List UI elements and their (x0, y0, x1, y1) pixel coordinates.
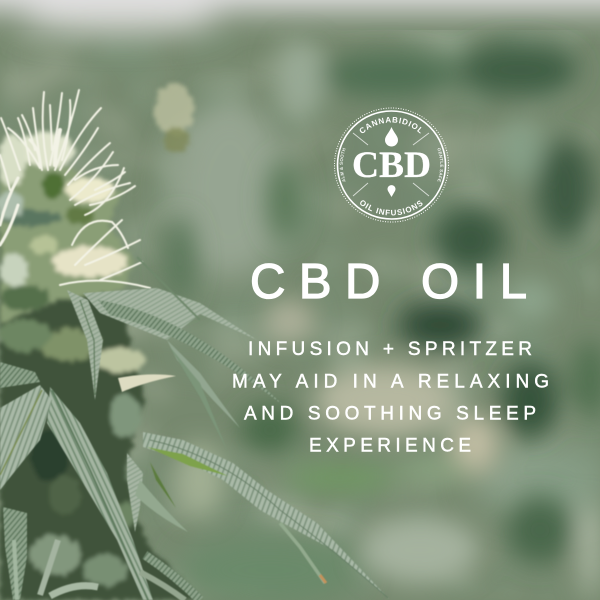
badge side text right: GENTLE SAFE (437, 148, 444, 182)
bud: pistil hairs (0, 90, 150, 288)
badge heading: CANNABIDIOL: CANNABIDIOL (360, 117, 422, 134)
leaf: left wide leaf (0, 362, 52, 490)
badge rays (353, 133, 429, 196)
leaf: bottom left vertical leaf (3, 507, 27, 600)
badge side text left: CALM & SOOTHE (340, 148, 346, 182)
title: CBD OIL (250, 255, 527, 309)
background bud out of focus (154, 84, 194, 153)
plant: cannabis bud and leaves (0, 90, 390, 600)
description text: AND SOOTHING SLEEP (244, 404, 536, 424)
leaf: narrow drooping leaves (98, 300, 283, 450)
description text (232, 339, 549, 456)
badge icon: small droplet (388, 185, 396, 197)
bud: calyx body (0, 132, 135, 325)
description text: INFUSION + SPRITZER (248, 339, 532, 360)
leaf: vertical leaf below bud (67, 290, 103, 400)
badge: CBD oil infusions seal (334, 108, 449, 222)
leaf: bottom frosted clusters (40, 540, 200, 600)
badge heading: OIL INFUSIONS: OIL INFUSIONS (360, 200, 422, 216)
leaf: pale fringe and small blades (118, 374, 188, 532)
badge wordmark: CBD: CBD (352, 145, 431, 186)
badge icon: large droplet (385, 127, 398, 146)
dark foliage mass (0, 230, 200, 600)
leaf: long serrated leaf reaching right (143, 432, 390, 600)
leaf: large central leaf (47, 387, 153, 600)
description text: EXPERIENCE (309, 436, 471, 456)
badge solid ring (338, 111, 446, 219)
description text: MAY AID IN A RELAXING (232, 372, 549, 392)
badge dotted outer ring (334, 108, 448, 222)
leaf: frosted upper leaf (83, 257, 257, 340)
